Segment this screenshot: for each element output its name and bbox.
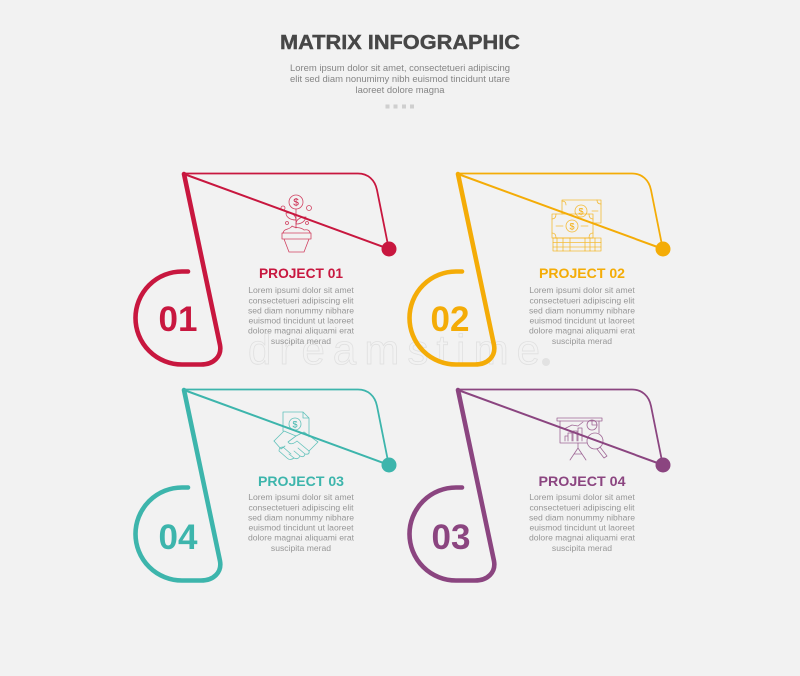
text 01: sed diam nonummy nibhare [248, 306, 354, 316]
text 03: dolore magnai aliquami erat [248, 532, 355, 542]
heading 03: PROJECT 03 [258, 473, 344, 489]
title dots [386, 104, 414, 108]
text 01: suscipita merad [271, 336, 331, 346]
panel: project 03 [136, 390, 396, 580]
text 04 [529, 492, 636, 553]
icon: banknotes [552, 200, 601, 251]
text 04: sed diam nonummy nibhare [529, 512, 635, 522]
panel: project 01 [136, 174, 396, 364]
subtitle [290, 63, 510, 95]
text 02: sed diam nonummy nibhare [529, 306, 635, 316]
text 03: consectetueri adipiscing elit [248, 502, 354, 512]
text 01: consectetueri adipiscing elit [248, 296, 354, 306]
text 02: consectetueri adipiscing elit [529, 296, 635, 306]
number 01: 01 [159, 300, 197, 339]
text 02 [529, 285, 636, 346]
number 02: 02 [431, 300, 469, 339]
note shape 01 [136, 174, 396, 364]
text 04: dolore magnai aliquami erat [529, 532, 636, 542]
heading 04: PROJECT 04 [538, 473, 626, 489]
text 03: Lorem ipsumi dolor sit amet [248, 492, 354, 502]
number 03: 03 [432, 518, 470, 557]
text 03 [248, 492, 355, 553]
subtitle: laoreet dolore magna [356, 85, 445, 95]
subtitle: elit sed diam nonumimy nibh euismod tincidunt utare [290, 74, 510, 84]
heading 01: PROJECT 01 [259, 265, 343, 281]
icon: handshake: $ [292, 420, 298, 430]
text 01 [248, 285, 355, 346]
text 02: Lorem ipsumi dolor sit amet [529, 285, 635, 295]
text 04: Lorem ipsumi dolor sit amet [529, 492, 635, 502]
number 04: 04 [159, 518, 198, 557]
text 02: suscipita merad [552, 336, 612, 346]
heading 02: PROJECT 02 [539, 265, 625, 281]
icon: money plant [281, 195, 312, 252]
icon: banknotes: $ [578, 206, 584, 216]
title: MATRIX INFOGRAPHIC [280, 32, 520, 54]
watermark: dreamstime [248, 326, 540, 373]
text 02: dolore magnai aliquami erat [529, 326, 636, 336]
note shape 04 [136, 390, 396, 580]
text 03: suscipita merad [271, 543, 331, 553]
note shape 03 [410, 390, 670, 580]
icon: banknotes: $ [569, 222, 575, 232]
subtitle: Lorem ipsum dolor sit amet, consectetueri adipiscing [290, 63, 510, 73]
text 04: consectetueri adipiscing elit [529, 502, 635, 512]
panel: project 02 [410, 174, 670, 364]
text 03: euismod tincidunt ut laoreet [248, 522, 354, 532]
icon: handshake [274, 412, 318, 460]
panel: project 04 [410, 390, 670, 580]
text 01: Lorem ipsumi dolor sit amet [248, 285, 354, 295]
text 01: euismod tincidunt ut laoreet [248, 316, 354, 326]
text 01: dolore magnai aliquami erat [248, 326, 355, 336]
icon: presentation board [557, 418, 607, 460]
note shape 02 [410, 174, 670, 364]
text 03: sed diam nonummy nibhare [248, 512, 354, 522]
text 02: euismod tincidunt ut laoreet [529, 316, 635, 326]
icon: money plant: $ [293, 198, 299, 208]
text 04: suscipita merad [552, 543, 612, 553]
text 04: euismod tincidunt ut laoreet [529, 522, 635, 532]
